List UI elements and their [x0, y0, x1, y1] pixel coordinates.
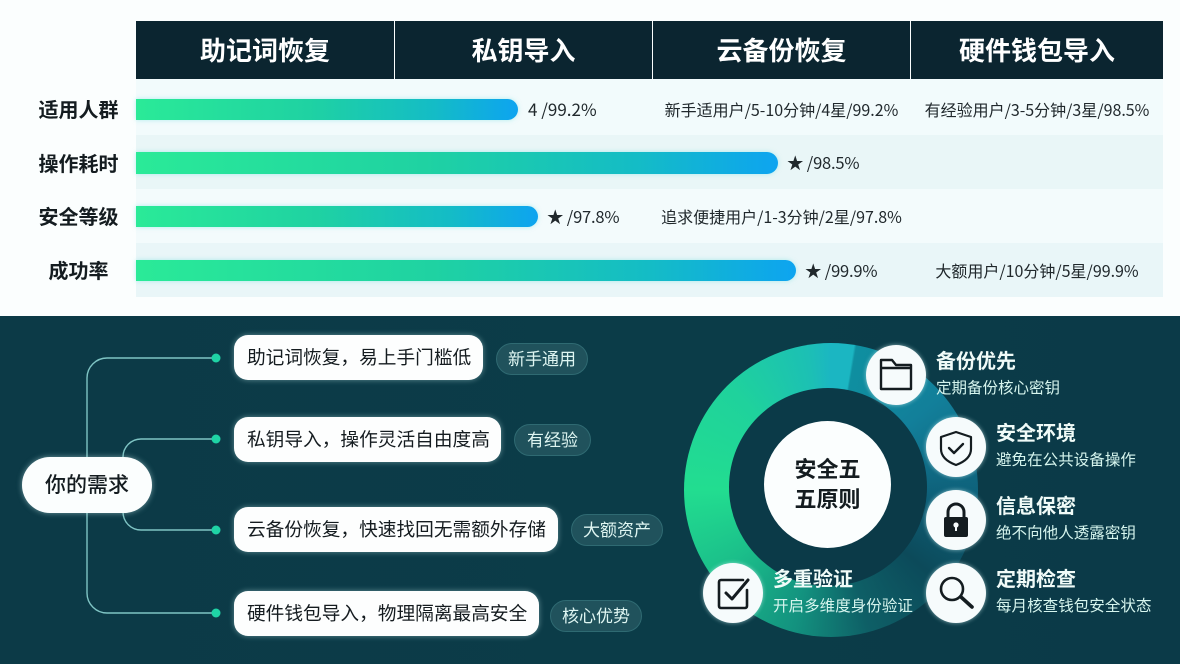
- text: 安全环境: [996, 417, 1136, 470]
- text: 多重验证: [773, 563, 913, 616]
- bar: row 3: [136, 206, 538, 227]
- option: 私钥导入: 私钥导入，操作灵活自由度高: [247, 425, 490, 452]
- description: 每月核查钱包安全状态: [996, 594, 1152, 616]
- root node: 你的需求: 你的需求: [45, 469, 129, 499]
- chart: safety principles ring: [684, 343, 978, 637]
- text: 信息保密: [996, 490, 1136, 543]
- description: 避免在公共设备操作: [996, 448, 1136, 470]
- bar: row 2: [136, 152, 778, 174]
- tag: 有经验: [514, 424, 591, 456]
- value: hardware row 4: 大额用户/10分钟/5星/99.9%: [935, 258, 1139, 282]
- table header: 助记词恢复: [136, 21, 394, 79]
- option: 云备份恢复: [234, 507, 558, 552]
- table header: 云备份恢复: 云备份恢复: [716, 31, 846, 68]
- description: 开启多维度身份验证: [773, 594, 913, 616]
- panel: lower dark section: [0, 316, 1180, 664]
- tag: 核心优势: 核心优势: [562, 602, 630, 627]
- table header: 助记词恢复: 助记词恢复: [200, 31, 330, 68]
- ring inner hole: [729, 388, 927, 586]
- row label: 安全等级: 安全等级: [38, 201, 118, 230]
- description: 绝不向他人透露密钥: [996, 521, 1136, 543]
- tag: 大额资产: [571, 514, 663, 546]
- tag: 大额资产: 大额资产: [583, 516, 651, 541]
- value: cloud row 1: 新手适用户/5-10分钟/4星/99.2%: [665, 97, 898, 121]
- tag: 有经验: 有经验: [527, 426, 578, 451]
- value: row 4 bar: ★ /99.9%: [805, 258, 877, 282]
- title: 备份优先: [936, 345, 1016, 374]
- table row backgrounds: [136, 79, 1163, 297]
- ring centre: 安全五五原则: 五原则: [794, 482, 860, 514]
- title: 信息保密: [996, 490, 1076, 519]
- option: 助记词恢复: [234, 335, 483, 380]
- tag: 新手通用: [496, 343, 588, 375]
- table header: 硬件钱包导入: 硬件钱包导入: [959, 31, 1115, 68]
- option: 硬件钱包导入: [234, 591, 539, 636]
- value: cloud row 3: 追求便捷用户/1-3分钟/2星/97.8%: [661, 204, 902, 228]
- table header: 硬件钱包导入: [911, 21, 1163, 79]
- option: 私钥导入: [234, 417, 501, 462]
- value: hardware row 1: 有经验用户/3-5分钟/3星/98.5%: [925, 97, 1149, 121]
- icon: padlock: [926, 490, 986, 550]
- icon: magnifier: [926, 563, 986, 623]
- description: 定期备份核心密钥: [936, 376, 1060, 398]
- title: 安全环境: [996, 417, 1076, 446]
- ring centre: 安全五五原则: [764, 421, 891, 548]
- bar: row 4: [136, 260, 796, 281]
- value: row 1 bar: 4 /99.2%: [528, 96, 597, 121]
- icon: checkbox: [703, 563, 763, 623]
- table header: 云备份恢复: [653, 21, 910, 79]
- table header: 私钥导入: [395, 21, 652, 79]
- row label: 适用人群: 适用人群: [38, 94, 118, 123]
- ring centre: 安全五五原则: 安全五: [794, 452, 860, 484]
- option: 硬件钱包导入: 硬件钱包导入，物理隔离最高安全: [247, 599, 527, 626]
- tag: 新手通用: 新手通用: [508, 345, 576, 370]
- row label: 操作耗时: 操作耗时: [38, 148, 118, 177]
- option: 助记词恢复: 助记词恢复，易上手门槛低: [247, 343, 471, 370]
- text: 备份优先: [936, 345, 1060, 398]
- icon: shield: [926, 417, 986, 477]
- title: 多重验证: [773, 563, 853, 592]
- title: 定期检查: [996, 563, 1076, 592]
- value: row 2 bar: ★ /98.5%: [787, 150, 859, 174]
- value: row 3 bar: ★ /97.8%: [547, 204, 619, 228]
- icon: folder: [866, 345, 926, 405]
- bar: row 1: [136, 99, 518, 120]
- table header: 私钥导入: 私钥导入: [471, 31, 576, 68]
- panel: comparison table: [38, 21, 1163, 297]
- text: 定期检查: [996, 563, 1152, 616]
- option: 云备份恢复: 云备份恢复，快速找回无需额外存储: [247, 515, 546, 542]
- tag: 核心优势: [550, 600, 642, 632]
- row label: 成功率: 成功率: [48, 255, 108, 284]
- root node: 你的需求: [22, 457, 152, 513]
